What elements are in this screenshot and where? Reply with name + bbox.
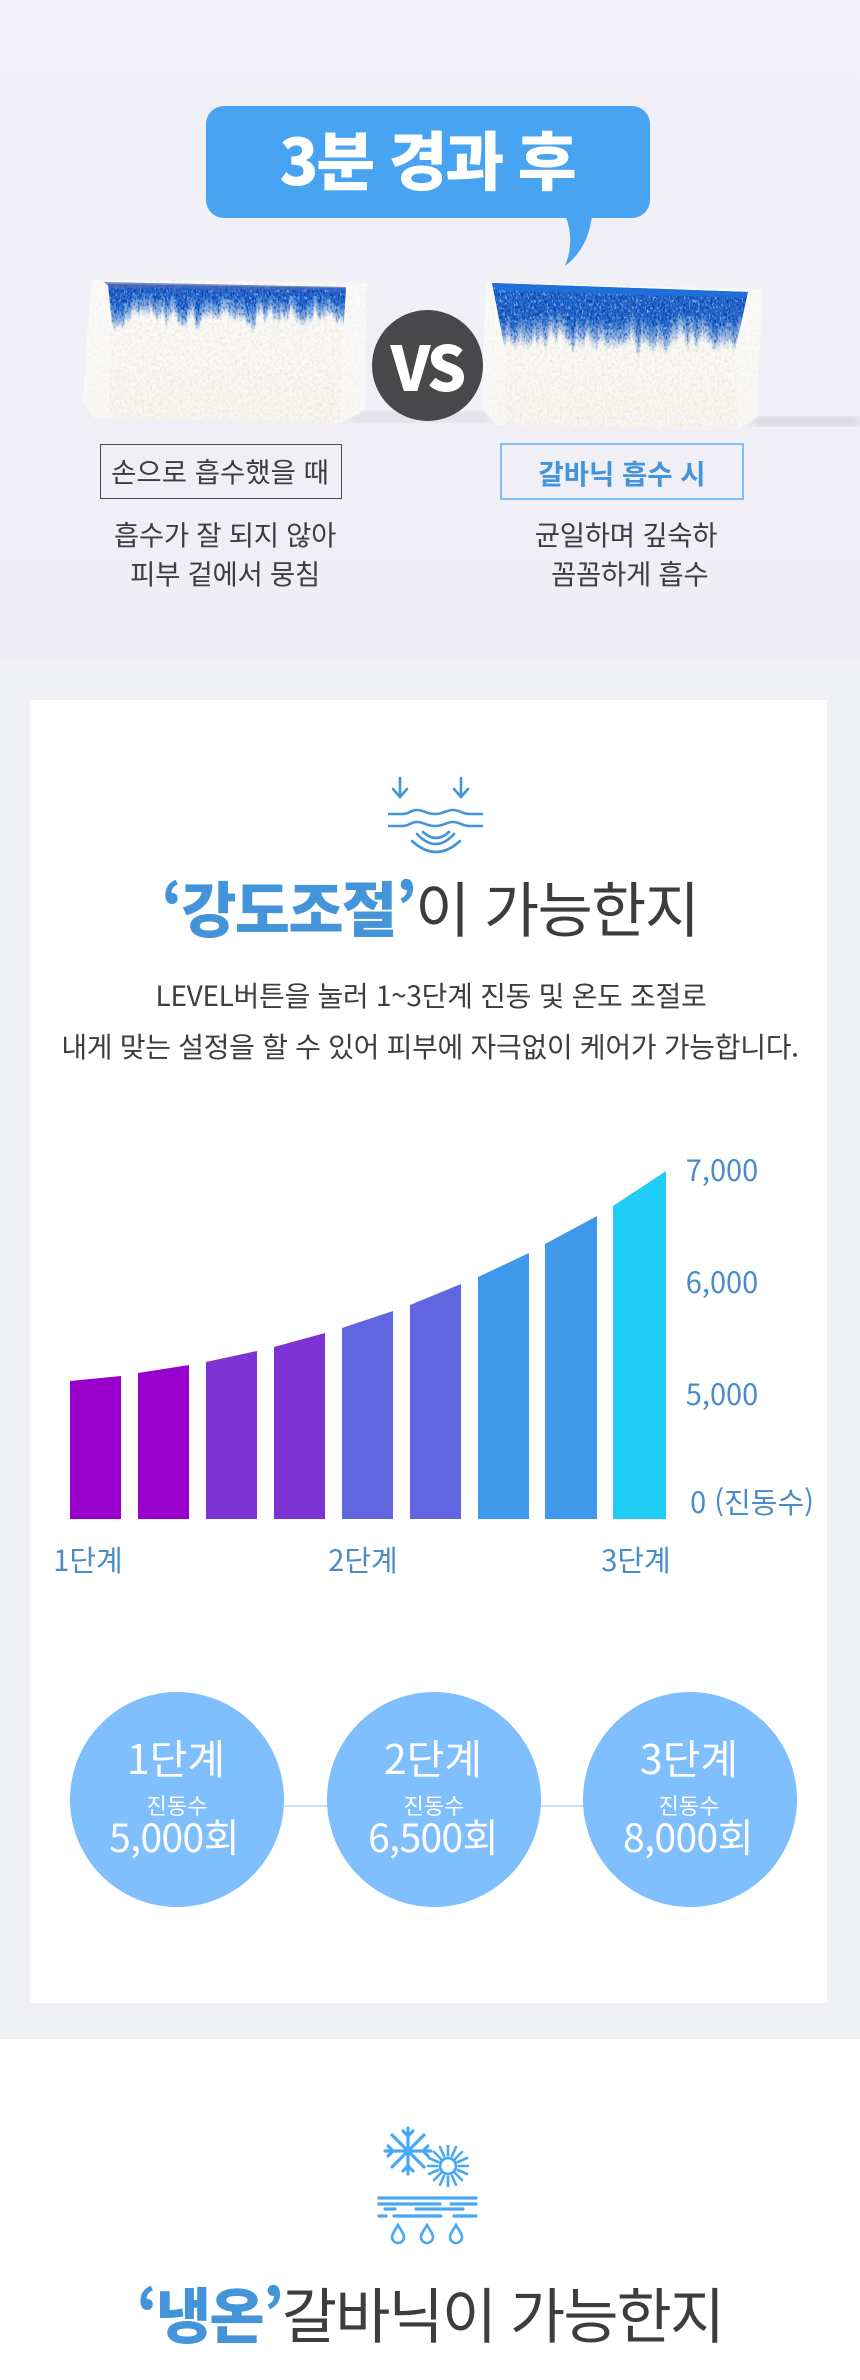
axis label: 5,000: 5,000 xyxy=(686,1372,758,1414)
label: galvanic absorption xyxy=(500,443,744,500)
text: level 3 title: 3단계 xyxy=(640,1726,738,1786)
text: level 1 title: 1단계 xyxy=(127,1726,225,1786)
axis label: level 1: 1단계 xyxy=(53,1538,123,1580)
text: level 2 title: 2단계 xyxy=(384,1726,482,1786)
icon: water vibration xyxy=(388,776,483,854)
panel: 3-minute result comparison xyxy=(0,0,860,662)
text: vibration label: 진동수 xyxy=(147,1789,207,1821)
circle: level 3 xyxy=(583,1692,797,1907)
bar 6 xyxy=(410,1284,461,1519)
bar 3 xyxy=(206,1351,257,1519)
axis label: level 3: 3단계 xyxy=(601,1538,671,1580)
heading: hot and cold galvanic: ‘냉온’갈바닉이 가능한지 xyxy=(137,2269,723,2356)
text: intensity description line 2: 내게 맞는 설정을 할 수 있어 피부에 자극없이 케어가 가능합니다. xyxy=(61,1026,799,1066)
text: galvanic absorption description: 균일하며 깊숙하 xyxy=(535,513,717,553)
text: VS: VS xyxy=(391,319,463,409)
label: hand absorption xyxy=(100,444,342,499)
axis label: 0 vibrations: 0 (진동수) xyxy=(690,1480,814,1522)
axis label: 7,000: 7,000 xyxy=(686,1148,758,1190)
icon: VS badge xyxy=(372,310,483,421)
circle: level 2 xyxy=(327,1692,541,1907)
bar 5 xyxy=(342,1311,393,1519)
heading: 3분 경과 후: 3분 경과 후 xyxy=(280,112,574,204)
heading: intensity control: ‘강도조절’이 가능한지 xyxy=(162,863,698,950)
text: galvanic absorption label: 갈바닉 흡수 시 xyxy=(538,452,706,492)
bar 7 xyxy=(478,1253,529,1519)
axis label: level 2: 2단계 xyxy=(328,1538,398,1580)
text: level 1 count: 5,000회 xyxy=(109,1808,239,1864)
text: vibration label: 진동수 xyxy=(404,1789,464,1821)
callout: 3-minute result bubble xyxy=(206,106,650,218)
bar 1 xyxy=(70,1376,121,1519)
axis label: 6,000: 6,000 xyxy=(686,1260,758,1302)
connector line xyxy=(284,1805,584,1807)
callout: speech bubble tail xyxy=(565,218,592,266)
text: intensity description: LEVEL버튼을 눌러 1~3단계 진동 및 온도 조절로 xyxy=(156,975,706,1015)
bar chart: vibration per level xyxy=(70,1171,666,1519)
bar 4 xyxy=(274,1333,325,1519)
text: level 2 count: 6,500회 xyxy=(368,1808,498,1864)
icon: snowflake, sun and drops xyxy=(377,2126,478,2244)
bar 2 xyxy=(138,1365,189,1519)
text: galvanic absorption description xyxy=(535,513,717,592)
panel: intensity section background xyxy=(0,662,860,2039)
sponge: galvanic absorption xyxy=(480,272,762,430)
panel: intensity card xyxy=(30,700,827,2003)
text: hand absorption description: 흡수가 잘 되지 않아 xyxy=(114,513,336,553)
text: hand absorption label: 손으로 흡수했을 때 xyxy=(111,450,329,490)
text: hand absorption description: 피부 겉에서 뭉침 xyxy=(130,552,320,592)
shadow: floor shadows xyxy=(350,412,860,426)
photo: sponge comparison xyxy=(84,280,860,430)
text: hand absorption description xyxy=(114,513,336,592)
bar 9 xyxy=(613,1171,666,1519)
text: galvanic absorption description: 꼼꼼하게 흡수 xyxy=(551,552,708,592)
text: level 3 count: 8,000회 xyxy=(623,1808,753,1864)
bar 8 xyxy=(545,1216,597,1519)
text: vibration label: 진동수 xyxy=(659,1789,719,1821)
sponge: hand absorption xyxy=(83,272,367,423)
circle: level 1 xyxy=(70,1692,284,1907)
